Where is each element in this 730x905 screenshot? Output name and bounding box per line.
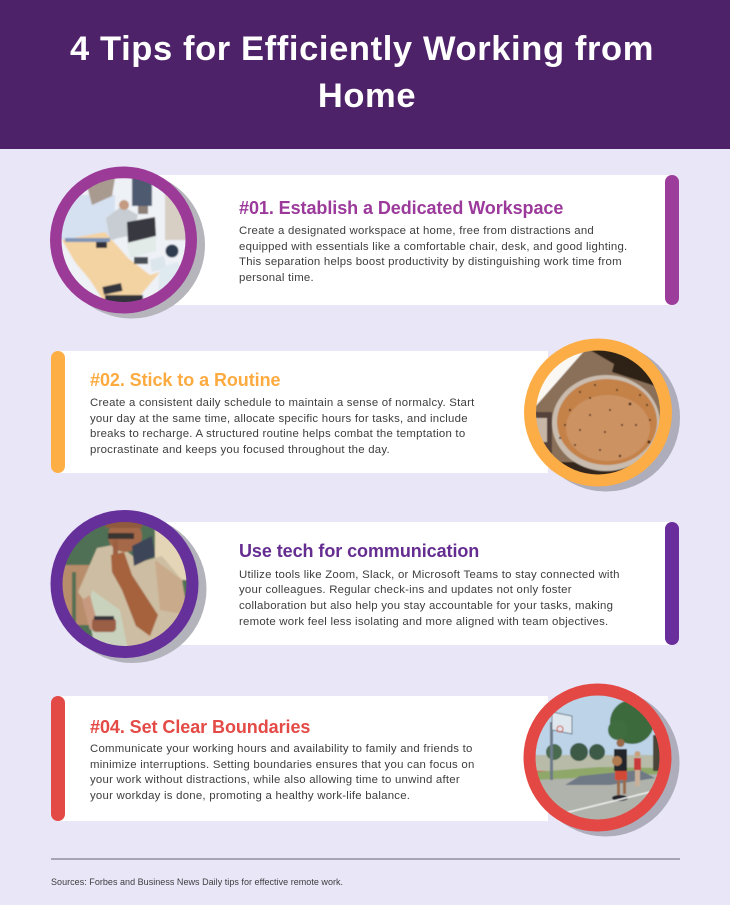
text 3: collaboration but also help you stay accountable for your tasks, making (239, 600, 613, 612)
sources note: Sources: Forbes and Business News Daily tips for effective remote work. (51, 877, 343, 887)
text 2: procrastinate and keeps you focused throughout the day. (90, 444, 390, 456)
title: Home (318, 77, 416, 115)
text 3 (239, 568, 620, 628)
text 1: Create a designated workspace at home, free from distractions and (239, 225, 594, 237)
card background 1 (120, 175, 672, 305)
panel: tip 2 (51, 338, 680, 492)
icon: office photo circle (50, 166, 205, 318)
heading 1: #01. Establish a Dedicated Workspace (239, 198, 563, 218)
text 4: minimize interruptions. Setting boundaries ensures that you can focus on (90, 759, 475, 771)
panel: tip 4 (51, 684, 680, 836)
text 1: personal time. (239, 272, 314, 284)
text 4: Communicate your working hours and availability to family and friends to (90, 743, 473, 755)
accent bar 4 (51, 696, 65, 821)
text 1: This separation helps boost productivity by distinguishing work time from (239, 256, 622, 268)
icon: man with phone photo circle (50, 510, 206, 663)
text 2: Create a consistent daily schedule to maintain a sense of normalcy. Start (90, 397, 475, 409)
title (70, 30, 654, 115)
header banner (0, 0, 730, 149)
text 3: Utilize tools like Zoom, Slack, or Microsoft Teams to stay connected with (239, 568, 620, 580)
text 4: your work without distractions, while also allowing time to unwind after (90, 774, 460, 786)
card background 3 (150, 522, 672, 645)
text 4: your workday is done, promoting a healthy work-life balance. (90, 790, 410, 802)
text 1: equipped with essentials like a comfortable chair, desk, and good lighting. (239, 241, 627, 253)
panel: tip 3 (50, 510, 679, 663)
text 1 (239, 225, 627, 284)
text 4 (90, 743, 475, 802)
heading 4: #04. Set Clear Boundaries (90, 717, 310, 737)
panel: tip 1 (50, 166, 679, 318)
text 3: your colleagues. Regular check-ins and updates not only foster (239, 584, 572, 596)
text 2: your day at the same time, allocate specific hours for tasks, and include (90, 413, 468, 425)
card background 4 (58, 696, 548, 821)
heading 2: #02. Stick to a Routine (90, 370, 280, 390)
accent bar 1 (665, 175, 679, 305)
heading 3: Use tech for communication (239, 541, 479, 561)
accent bar 2 (51, 351, 65, 473)
accent bar 3 (665, 522, 679, 645)
divider line (51, 858, 680, 860)
text 2 (90, 397, 475, 456)
text 2: breaks to recharge. A structured routine helps combat the temptation to (90, 428, 465, 440)
title: 4 Tips for Efficiently Working from (70, 30, 654, 68)
text 3: remote work feel less isolating and more aligned with team objectives. (239, 616, 608, 628)
icon: coffee photo circle (524, 338, 680, 492)
card background 2 (58, 351, 548, 473)
icon: basketball court photo circle (524, 684, 680, 836)
